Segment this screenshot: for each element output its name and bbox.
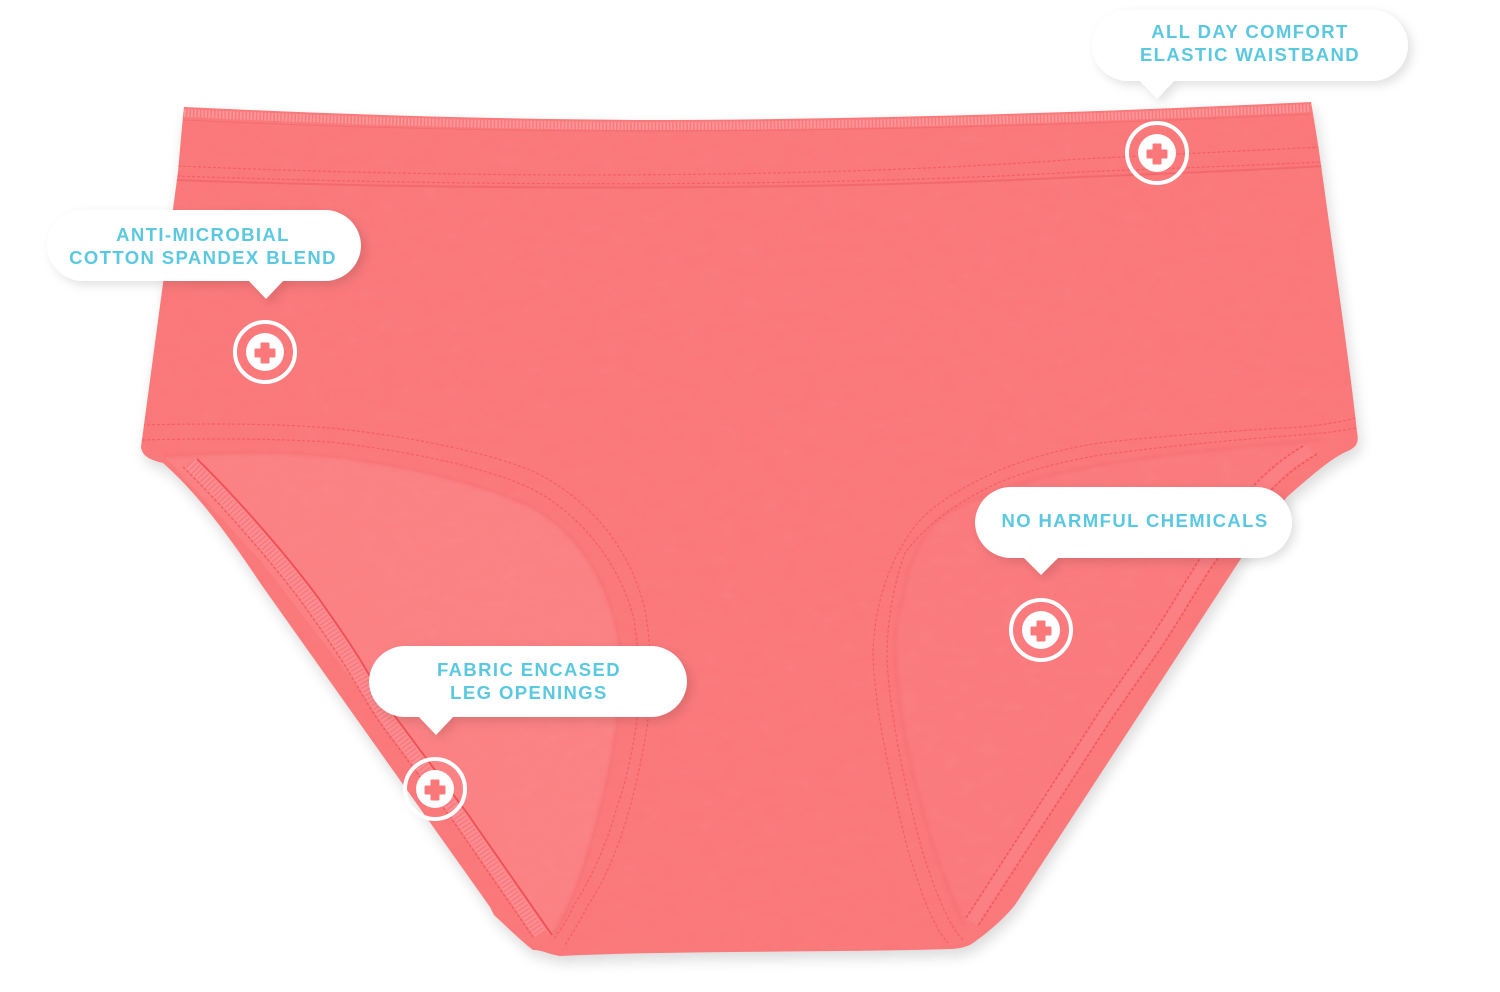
callout: no harmful chemicals: NO HARMFUL CHEMICALS [1001,510,1269,531]
right overlock seam [966,446,1317,926]
callout: fabric encased leg openings: FABRIC ENCASED [437,659,621,680]
callout: all day comfort elastic waistband [1092,10,1408,99]
callout: anti-microbial cotton spandex blend: ANTI-MICROBIAL [116,224,290,245]
callout: fabric encased leg openings [369,646,687,735]
stitching [142,147,1356,945]
right leg opening: inner back fabric [895,440,1320,925]
callout: fabric encased leg openings: LEG OPENINGS [450,682,608,703]
garment: coral briefs [130,95,1370,965]
callout: no harmful chemicals [975,487,1292,575]
icon: plus marker waistband [1127,123,1187,183]
left overlock seam [183,459,552,937]
icon: plus marker chemicals [1011,600,1071,660]
callout: all day comfort elastic waistband: ALL DAY COMFORT [1151,21,1349,42]
callout: anti-microbial cotton spandex blend [47,210,361,299]
icon: plus marker leg openings [405,759,465,819]
callout: all day comfort elastic waistband: ELASTIC WAISTBAND [1140,44,1360,65]
icon: plus marker fabric blend [235,322,295,382]
callout: anti-microbial cotton spandex blend: COTTON SPANDEX BLEND [69,247,337,268]
waistband top edge ribbing [184,108,1311,126]
waistband fold [176,166,1324,188]
left leg opening: inner back fabric [165,453,621,937]
fabric texture [130,95,1370,965]
